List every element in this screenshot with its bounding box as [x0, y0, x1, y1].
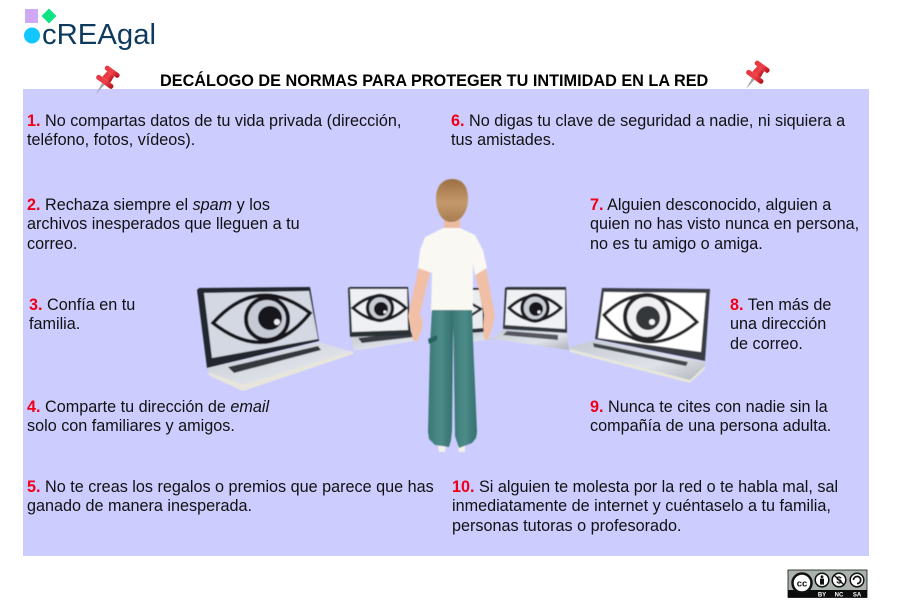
right trouser leg	[452, 310, 477, 448]
cc icon	[792, 574, 812, 592]
laptop behind the figure	[470, 288, 494, 342]
rule 9	[590, 398, 831, 435]
rule 5: 5. No te creas los regalos o premios que parece que has	[27, 478, 434, 496]
logo green diamond	[42, 8, 56, 24]
rule 2	[27, 196, 300, 253]
rule 6: tus amistades.	[451, 131, 555, 149]
logo lilac square	[25, 9, 38, 23]
licence labels: BY	[818, 592, 826, 598]
shirt	[418, 228, 487, 311]
rule 9: compañía de una persona adulta.	[590, 417, 831, 435]
laptop: near right, small	[493, 287, 569, 350]
Creative Commons badge: NC	[835, 592, 844, 598]
rule 4	[27, 398, 270, 435]
rule 2: archivos inesperados que lleguen a tu	[27, 215, 300, 233]
rule 7: 7. Alguien desconocido, alguien a	[590, 196, 831, 214]
rule 7: no es tu amigo o amiga.	[590, 235, 763, 253]
neck	[444, 218, 460, 232]
rule 6	[451, 112, 846, 149]
rule 1: 1. No compartas datos de tu vida privada (dirección,	[27, 112, 401, 130]
rule 10: inmediatamente de internet y cuéntaselo a tu familia,	[452, 497, 831, 515]
title: DECÁLOGO DE NORMAS PARA PROTEGER TU INTIMIDAD EN LA RED	[160, 72, 708, 90]
rule 3: 3. Confía en tu	[29, 296, 135, 314]
figure of a young person seen from behind	[408, 179, 495, 452]
logo wordmark: cREAgal	[42, 19, 156, 51]
Creative Commons badge	[788, 570, 867, 598]
rule 4: 4. Comparte tu dirección de email	[27, 398, 269, 416]
laptop: far left, large	[197, 287, 353, 391]
background panel	[23, 89, 869, 556]
Creative Commons badge: cc	[797, 578, 807, 590]
rule 3: familia.	[29, 315, 80, 333]
rule 1: teléfono, fotos, vídeos).	[27, 131, 195, 149]
rule 10: personas tutoras o profesorado.	[452, 517, 681, 535]
laptop: far right, large	[570, 288, 710, 383]
rule 1	[27, 112, 401, 149]
right arm	[475, 268, 495, 340]
logo cyan circle	[24, 28, 40, 44]
rule 8: una dirección	[730, 315, 826, 333]
rule 7	[590, 196, 859, 253]
rule 5: ganado de manera inesperada.	[27, 497, 252, 515]
nc icon: $	[836, 576, 842, 586]
sa icon	[850, 573, 864, 587]
rule 6: 6. No digas tu clave de seguridad a nadie, ni siquiera a	[451, 112, 845, 130]
icon: right red pushpin	[738, 59, 772, 95]
left trouser leg	[428, 310, 453, 447]
logo: cREAgal	[24, 8, 156, 51]
rule 9: 9. Nunca te cites con nadie sin la	[590, 398, 828, 416]
rule 5	[27, 478, 434, 515]
trouser loop	[428, 335, 437, 344]
rule 10: 10. Si alguien te molesta por la red o te habla mal, sal	[452, 478, 838, 496]
hair	[436, 179, 468, 222]
left arm	[408, 266, 430, 342]
rule 7: quien no has visto nunca en persona,	[590, 215, 859, 233]
by icon	[815, 573, 829, 587]
laptop: near left, small	[348, 287, 420, 351]
Creative Commons badge: SA	[853, 592, 862, 598]
shoes	[438, 446, 465, 452]
rule 4: solo con familiares y amigos.	[27, 417, 235, 435]
rule 2: correo.	[27, 235, 77, 253]
rule 10	[452, 478, 838, 535]
rule 2: 2. Rechaza siempre el spam y los	[27, 196, 270, 214]
rule 8: de correo.	[730, 335, 803, 353]
rule 3	[29, 296, 135, 333]
rule 8: 8. Ten más de	[730, 296, 831, 314]
icon: left red pushpin	[88, 64, 122, 100]
rule 8	[730, 296, 831, 353]
